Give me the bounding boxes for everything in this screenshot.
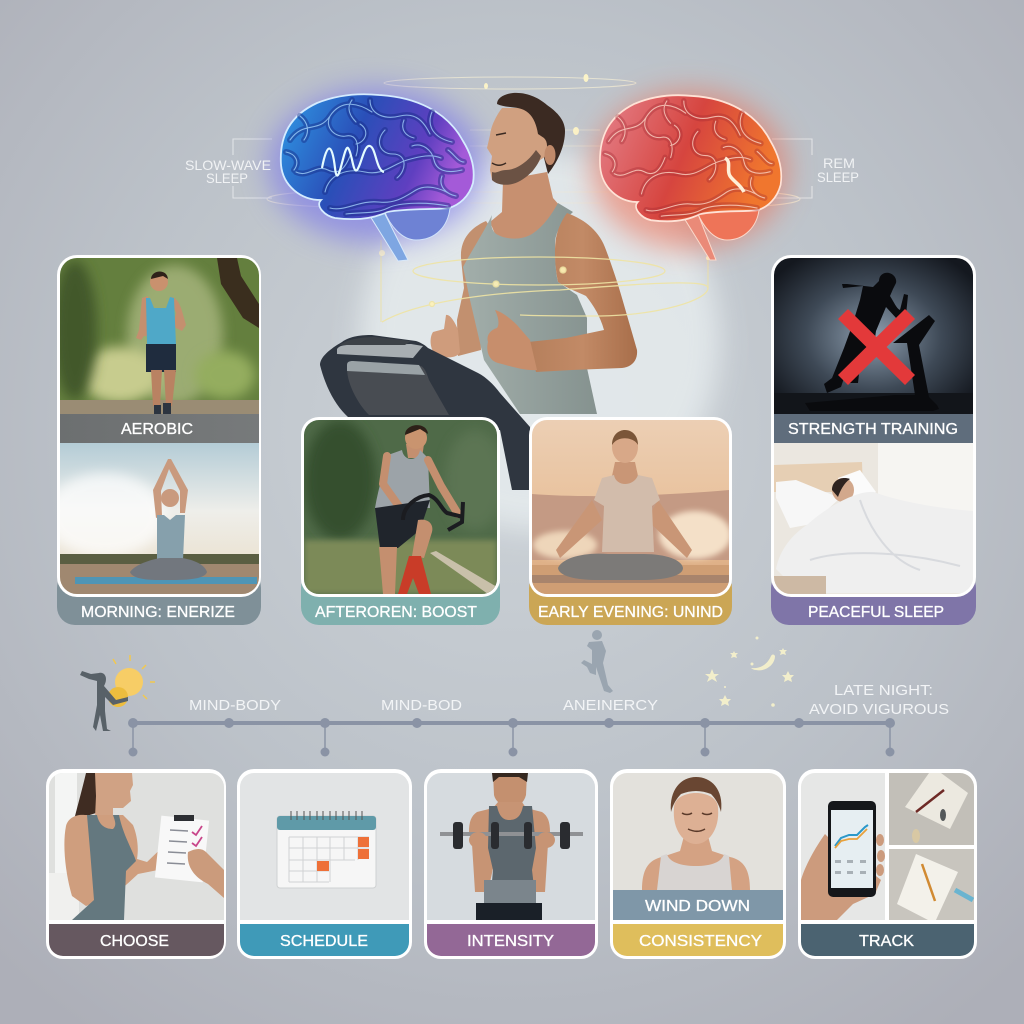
panel: strength training / peaceful sleep [771,255,976,625]
man on treadmill [431,93,637,414]
panel: aerobic / morning [45,255,261,625]
label: slow-wave sleep [185,157,271,186]
label band: aerobic [60,414,259,443]
label: slow-wave sleep: SLEEP [206,170,248,186]
label pill: peaceful sleep: PEACEFUL SLEEP [808,604,944,621]
photo: meditation at dusk [532,420,731,594]
label band: choose [49,924,224,956]
timeline labels: MIND-BOD [381,697,462,714]
timeline labels: ANEINERCY [563,697,658,714]
label band: strength: STRENGTH TRAINING [788,421,958,438]
orbit rings and connector lines [233,77,812,322]
label: slow-wave sleep: SLOW-WAVE [185,157,271,173]
neck [490,172,560,246]
far fist [431,315,460,357]
eye and smile [492,133,506,165]
card: intensity [424,769,598,959]
label band: consistency: CONSISTENCY [639,933,762,950]
card: choose [46,769,226,959]
icon: calendar [277,811,376,888]
timeline labels: AVOID VIGUROUS [809,701,949,718]
label band: track [801,924,974,956]
photo: yoga pose at sunrise [45,443,259,594]
notebook bottom [897,854,973,920]
label pill: afternoon: AFTEROREN: BOOST [315,604,478,621]
label band: wind down: WIND DOWN [645,898,750,915]
photo: bed [774,443,973,594]
panel: afternoon boost [301,417,505,625]
label band: consistency [613,924,783,956]
person with clipboard [64,773,224,920]
label pill: evening: EARLY EVENING: UNIND [538,604,723,621]
phone with chart [801,801,885,920]
brain: slow-wave sleep (blue-purple) [268,87,484,261]
photo: silhouette on treadmill with red X [774,258,973,415]
label band: intensity [427,924,595,956]
photo: cyclist [304,420,505,594]
label: REM sleep: SLEEP [817,169,859,185]
near fist [487,310,537,370]
front orbit rings over torso [382,257,708,322]
person with dumbbells [440,773,583,920]
beard [492,150,541,185]
label pill: morning [57,570,261,625]
person smiling [642,777,750,890]
label band: aerobic: AEROBIC [121,421,193,438]
card: track [798,769,977,959]
sparkles on top ring [379,74,710,260]
label pill: afternoon [301,570,500,625]
brain: REM sleep (red-orange) [592,90,788,260]
tank top [463,203,597,414]
label pill: morning: MORNING: ENERIZE [81,604,235,621]
panel: early evening unwind [529,417,732,625]
label band: wind down [613,890,783,920]
hair [497,93,565,174]
label band: strength [774,414,973,443]
timeline labels [189,682,949,718]
timeline labels: MIND-BODY [189,697,281,714]
timeline labels: LATE NIGHT: [834,682,933,699]
label band: choose: CHOOSE [100,933,169,950]
ear [544,145,556,165]
label pill: peaceful sleep [771,570,976,625]
label band: schedule [240,924,409,956]
label: REM sleep: REM [823,155,855,171]
face [487,108,548,185]
label band: intensity: INTENSITY [467,933,554,950]
label pill: evening [529,570,732,625]
icon: faded runner [581,630,613,693]
photo: runner on forest path [53,258,259,415]
label: REM sleep [817,155,859,185]
card: wind down / consistency [610,769,786,959]
label band: track: TRACK [859,933,915,950]
icon: moon and stars [705,636,794,707]
near arm [528,213,637,372]
far arm and shoulder [457,221,494,356]
timeline [128,718,895,756]
label band: schedule: SCHEDULE [280,933,368,950]
card: schedule [237,769,412,959]
icon: figure carrying sun [80,655,155,731]
central light glow [360,150,720,530]
notebook top [905,773,968,843]
treadmill console [320,335,530,490]
